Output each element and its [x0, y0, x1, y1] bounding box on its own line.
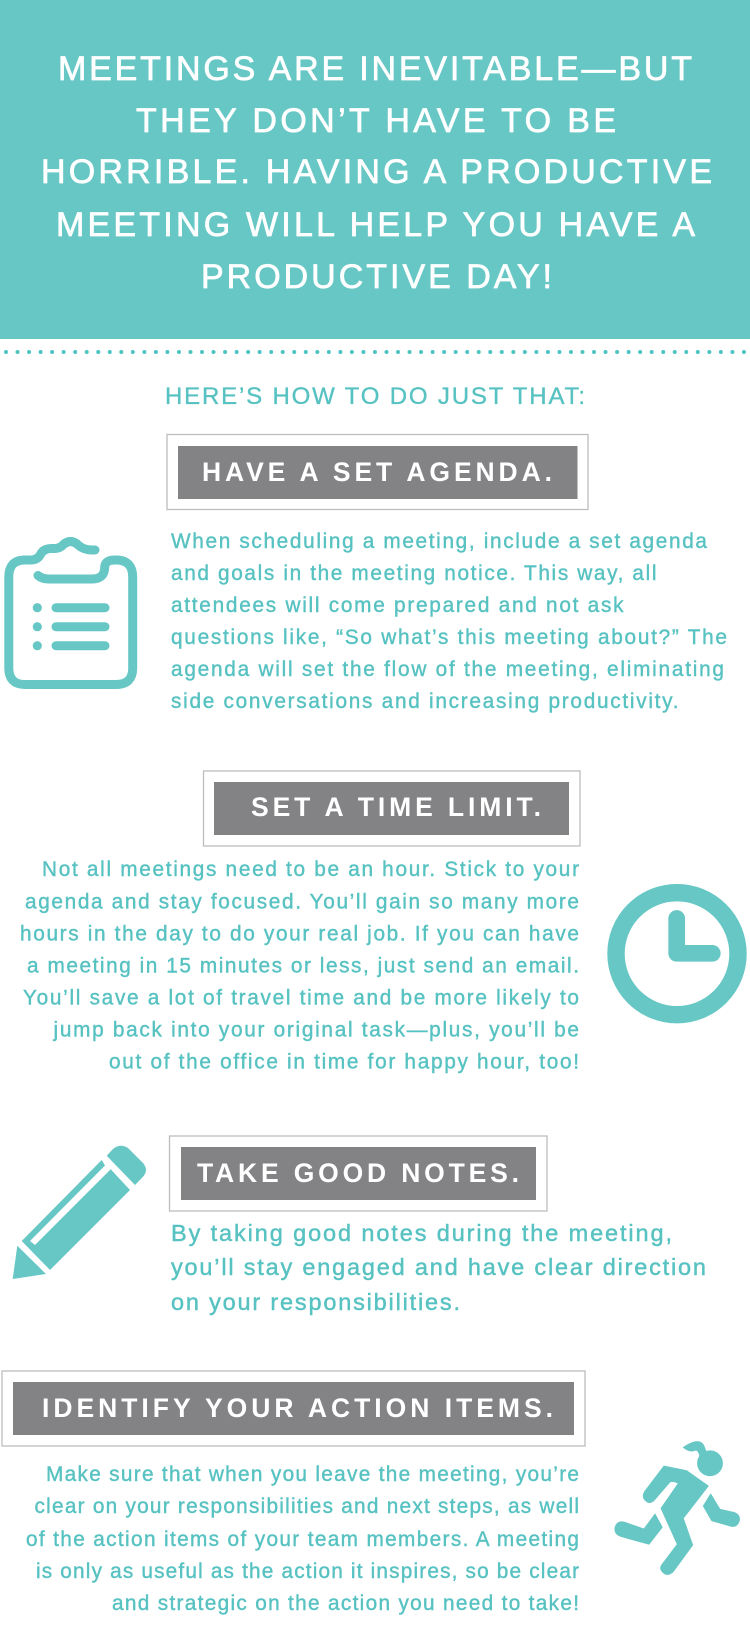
paragraph: action items: and strategic on the action you need to take! — [112, 1592, 579, 1615]
paragraph: agenda: agenda will set the flow of the meeting, eliminating — [171, 658, 724, 681]
banner — [0, 0, 750, 339]
heading box: identify your action items: IDENTIFY YOUR ACTION ITEMS. — [42, 1393, 553, 1423]
paragraph: agenda: side conversations and increasing productivity. — [171, 690, 678, 713]
paragraph: time limit: jump back into your original task—plus, you’ll be — [52, 1018, 579, 1042]
icon: runner — [615, 1442, 740, 1574]
section: set a time limit — [20, 771, 738, 1074]
banner heading: PRODUCTIVE DAY! — [201, 258, 552, 296]
paragraph: agenda: When scheduling a meeting, include a set agenda — [171, 530, 707, 553]
banner heading: MEETING WILL HELP YOU HAVE A — [56, 206, 695, 244]
icon: pencil — [13, 1146, 146, 1279]
icon: clock — [616, 893, 738, 1015]
paragraph: agenda: attendees will come prepared and not ask — [171, 594, 624, 617]
icon: clipboard — [9, 542, 133, 684]
paragraph: notes: on your responsibilities. — [171, 1289, 460, 1315]
banner heading: HORRIBLE. HAVING A PRODUCTIVE — [41, 153, 712, 191]
paragraph: time limit: You’ll save a lot of travel time and be more likely to — [23, 986, 579, 1010]
heading box: set a time limit — [204, 771, 580, 846]
paragraph: agenda: questions like, “So what’s this meeting about?” The — [171, 626, 727, 649]
heading box: take good notes — [170, 1136, 547, 1211]
section: identify your action items — [2, 1371, 740, 1615]
paragraph: time limit: a meeting in 15 minutes or less, just send an email. — [27, 954, 579, 978]
heading box: set a time limit: SET A TIME LIMIT. — [251, 792, 541, 822]
subheading: HERE’S HOW TO DO JUST THAT: — [165, 383, 585, 410]
heading box: have a set agenda — [167, 434, 588, 510]
paragraph: time limit: agenda and stay focused. You’ll gain so many more — [25, 890, 579, 914]
paragraph: action items — [26, 1463, 579, 1615]
paragraph: time limit: hours in the day to do your real job. If you can have — [20, 922, 579, 946]
banner heading — [41, 50, 712, 296]
banner heading: MEETINGS ARE INEVITABLE—BUT — [58, 50, 692, 88]
banner heading: THEY DON’T HAVE TO BE — [136, 102, 616, 140]
paragraph: action items: clear on your responsibilities and next steps, as well — [34, 1495, 579, 1518]
paragraph: agenda: and goals in the meeting notice. This way, all — [171, 562, 656, 585]
heading box: have a set agenda: HAVE A SET AGENDA. — [202, 457, 552, 487]
heading box: take good notes: TAKE GOOD NOTES. — [197, 1158, 519, 1188]
paragraph: action items: is only as useful as the action it inspires, so be clear — [36, 1560, 579, 1583]
paragraph: action items: of the action items of your team members. A meeting — [26, 1528, 579, 1551]
paragraph: time limit: Not all meetings need to be an hour. Stick to your — [42, 858, 579, 881]
paragraph: action items: Make sure that when you leave the meeting, you’re — [46, 1463, 579, 1486]
paragraph: notes: you’ll stay engaged and have clear direction — [171, 1254, 706, 1280]
section: take good notes — [13, 1136, 706, 1315]
paragraph: time limit — [20, 858, 579, 1074]
paragraph: notes — [171, 1220, 706, 1315]
paragraph: notes: By taking good notes during the meeting, — [171, 1220, 672, 1246]
heading box: identify your action items — [2, 1371, 585, 1446]
paragraph: agenda — [171, 530, 727, 713]
section: have a set agenda — [9, 434, 727, 713]
paragraph: time limit: out of the office in time for happy hour, too! — [109, 1050, 579, 1074]
